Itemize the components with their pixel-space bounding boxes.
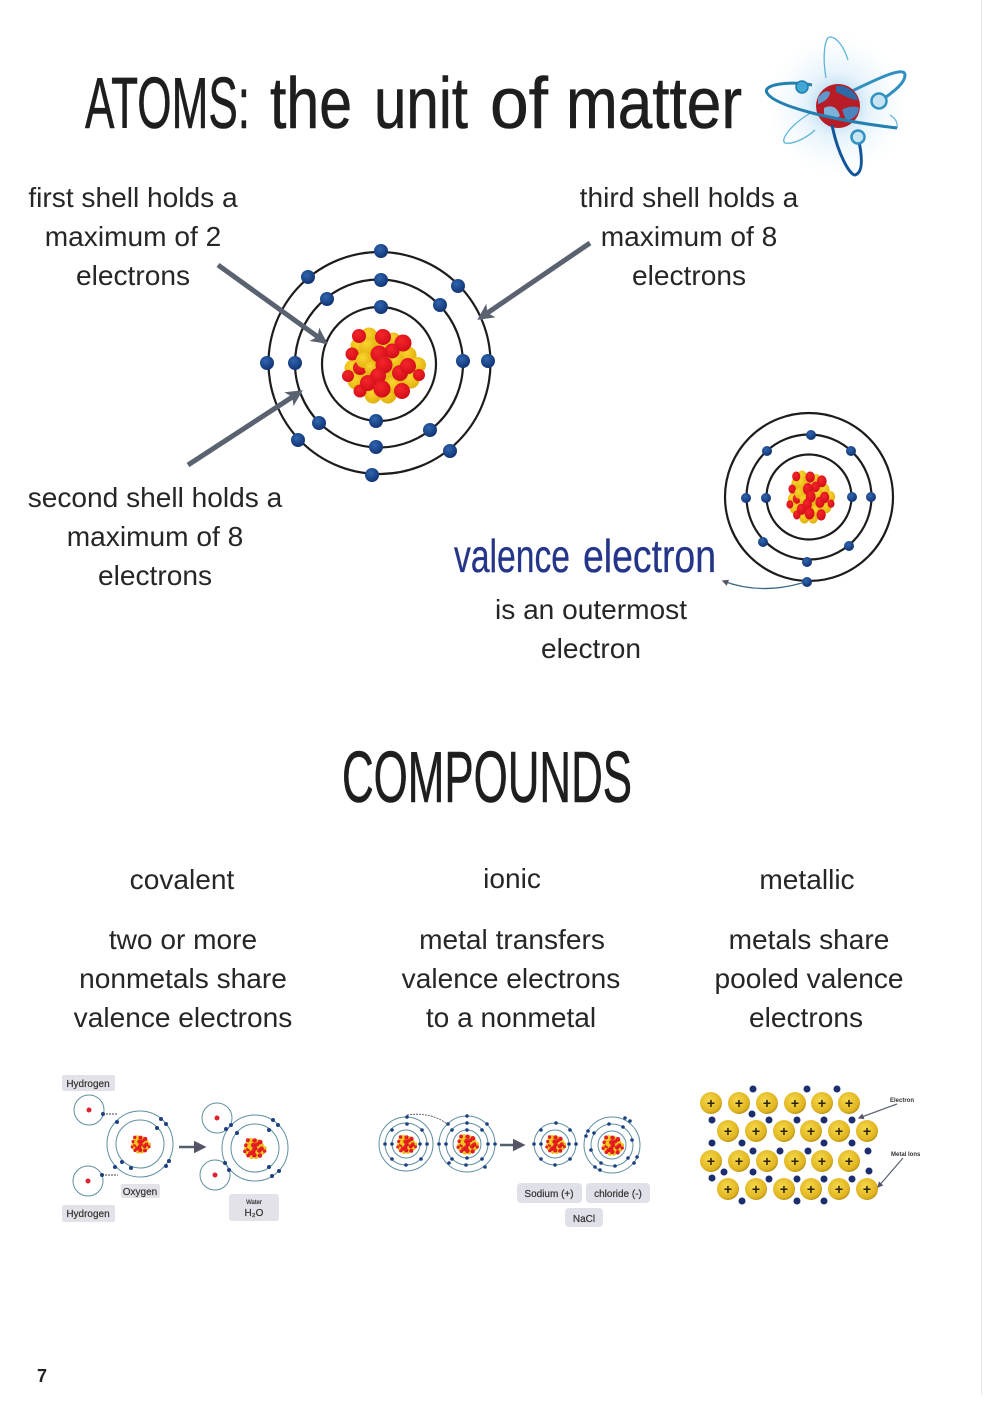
label: second shell	[28, 482, 283, 591]
diagram: main atom	[260, 244, 495, 482]
plus signs: +	[780, 1123, 788, 1139]
electrons	[260, 244, 495, 482]
plus signs: +	[724, 1181, 732, 1197]
column text: covalent: two or more	[109, 924, 257, 955]
plus signs: +	[791, 1095, 799, 1111]
label: second shell: electrons	[98, 560, 212, 591]
arrow: electron pointer	[859, 1104, 897, 1118]
column text: covalent: valence electrons	[74, 1002, 292, 1033]
diagram: covalent bond water: Oxygen	[123, 1187, 157, 1198]
label: metal ions: Metal Ions	[891, 1152, 921, 1158]
page number: 7	[37, 1366, 47, 1386]
label: second shell: maximum of 8	[67, 521, 243, 552]
arrow: valence electron pointer	[723, 581, 802, 589]
diagram: ionic bond NaCl: NaCl	[573, 1214, 595, 1225]
plus signs: +	[780, 1181, 788, 1197]
label: first shell	[28, 182, 238, 291]
column text: metallic: electrons	[749, 1002, 863, 1033]
plus signs: +	[818, 1153, 826, 1169]
column text: covalent: nonmetals share	[79, 963, 287, 994]
heading: valence electron: electron	[583, 530, 716, 582]
text: valence description: electron	[541, 633, 641, 664]
heading: valence electron: valence	[454, 530, 570, 582]
plus signs: +	[735, 1095, 743, 1111]
nucleus	[342, 328, 426, 404]
label: first shell: first shell holds a	[28, 182, 238, 213]
plus signs: +	[835, 1123, 843, 1139]
arrow: reaction	[500, 1144, 523, 1146]
plus signs: +	[735, 1153, 743, 1169]
column text: metallic: metallic	[759, 864, 855, 895]
column text: ionic: valence electrons	[402, 963, 620, 994]
title: ATOMS:	[85, 64, 250, 144]
plus signs: +	[818, 1095, 826, 1111]
diagram: covalent bond water: Hydrogen	[66, 1079, 110, 1090]
heading: valence electron	[454, 530, 716, 582]
heading: compounds: COMPOUNDS	[342, 738, 632, 818]
column text: ionic: to a nonmetal	[426, 1002, 596, 1033]
column text: ionic: ionic	[483, 863, 541, 894]
column text: metallic	[714, 864, 904, 1033]
title: the	[270, 64, 352, 144]
plus signs: +	[707, 1153, 715, 1169]
label: first shell: maximum of 2	[45, 221, 221, 252]
column text: metallic: metals share	[729, 924, 889, 955]
label: electron: Electron	[890, 1098, 914, 1104]
plus signs: +	[707, 1095, 715, 1111]
plus signs	[707, 1095, 871, 1197]
diagram: metallic bond	[700, 1086, 921, 1204]
arrow: ions pointer	[878, 1158, 903, 1187]
column text: covalent: covalent	[130, 864, 235, 895]
diagram: covalent bond water: H₂O	[245, 1208, 264, 1219]
diagram: valence atom	[723, 413, 893, 589]
plus signs: +	[752, 1181, 760, 1197]
scan edge	[980, 0, 982, 1395]
title: of	[490, 64, 549, 144]
plus signs: +	[835, 1181, 843, 1197]
column text: ionic	[402, 863, 620, 1033]
diagram: covalent bond water: Water	[246, 1200, 262, 1206]
diagram: covalent bond water: Hydrogen	[66, 1209, 110, 1220]
diagram: ionic bond NaCl: Sodium (+)	[524, 1189, 574, 1200]
label: first shell: electrons	[76, 260, 190, 291]
arrow: reaction	[179, 1146, 204, 1148]
column text: ionic: metal transfers	[419, 924, 605, 955]
plus signs: +	[863, 1181, 871, 1197]
plus signs: +	[807, 1181, 815, 1197]
arrow: to first shell	[218, 265, 325, 342]
free electrons	[708, 1086, 872, 1204]
diagram: ionic bond NaCl: chloride (-)	[594, 1189, 642, 1200]
arrow: to third shell	[480, 243, 590, 318]
plus signs: +	[845, 1095, 853, 1111]
plus signs: +	[752, 1123, 760, 1139]
column text: covalent	[74, 864, 292, 1033]
title	[85, 64, 742, 144]
title: unit	[374, 64, 468, 144]
plus signs: +	[807, 1123, 815, 1139]
diagram: covalent bond water	[62, 1075, 288, 1222]
plus signs: +	[863, 1123, 871, 1139]
label: third shell: electrons	[632, 260, 746, 291]
plus signs: +	[763, 1095, 771, 1111]
label: third shell: maximum of 8	[601, 221, 777, 252]
title: matter	[566, 64, 742, 144]
diagram: ionic bond NaCl	[379, 1114, 650, 1227]
text: valence description: is an outermost	[495, 594, 687, 625]
label: third shell	[580, 182, 799, 291]
column text: metallic: pooled valence	[714, 963, 904, 994]
plus signs: +	[791, 1153, 799, 1169]
icon: atom logo	[765, 33, 909, 177]
plus signs: +	[845, 1153, 853, 1169]
metal ions	[700, 1092, 878, 1200]
arrow: to second shell	[188, 392, 300, 465]
label: second shell: second shell holds a	[28, 482, 283, 513]
plus signs: +	[724, 1123, 732, 1139]
text: valence description	[495, 594, 687, 664]
plus signs: +	[763, 1153, 771, 1169]
label: third shell: third shell holds a	[580, 182, 799, 213]
